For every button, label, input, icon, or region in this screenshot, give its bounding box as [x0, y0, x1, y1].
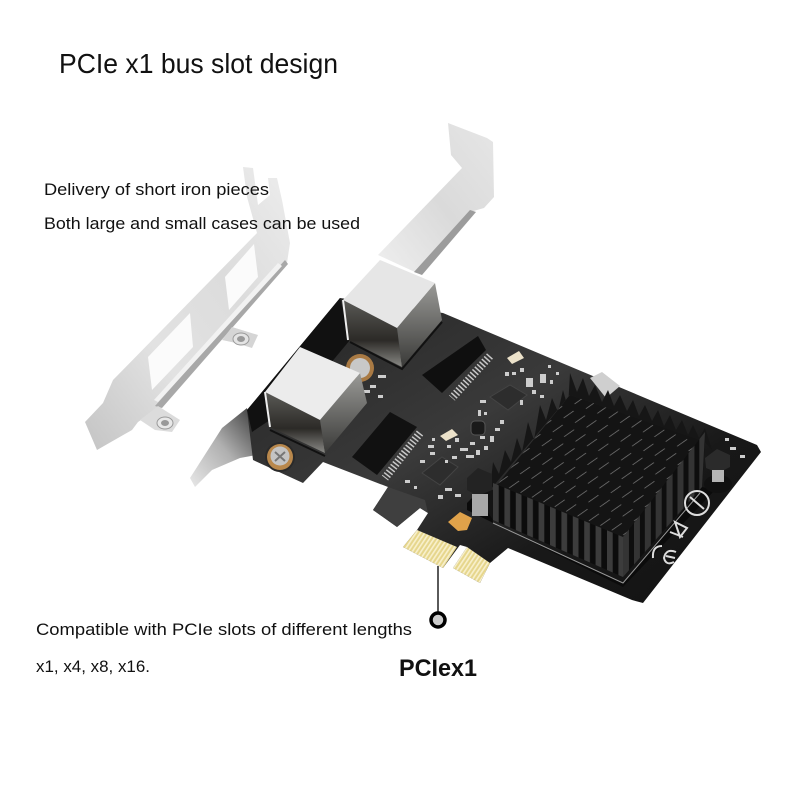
compatibility note: x1, x4, x8, x16. [36, 657, 150, 676]
heatsink [467, 373, 732, 587]
compatibility note [36, 620, 412, 676]
heatsink screws [467, 449, 732, 516]
title: PCIe x1 bus slot design [59, 48, 338, 79]
circuit board [247, 298, 761, 603]
SMD components [358, 351, 745, 499]
board outline trace [493, 493, 700, 583]
inductor [471, 421, 485, 435]
ethernet port front [265, 347, 367, 456]
heatsink top pins [493, 395, 705, 537]
PCIex1 label: PCIex1 [399, 655, 477, 682]
rear screw [346, 354, 374, 382]
heatsink sawtooth back edge [490, 373, 712, 490]
network chip 1 [422, 336, 490, 398]
regulatory marks [653, 491, 709, 563]
screw [265, 442, 295, 472]
bracket window openings [148, 244, 258, 390]
PCIe tab [373, 487, 428, 527]
bracket note: Delivery of short iron pieces [44, 180, 269, 199]
compatibility note: Compatible with PCIe slots of different lengths [36, 620, 412, 639]
bracket note: Both large and small cases can be used [44, 214, 360, 233]
capacitor [448, 512, 472, 531]
network chip 2 [352, 412, 420, 478]
ethernet port rear [343, 260, 442, 369]
PCIe gold fingers [403, 530, 490, 583]
heatsink base [470, 395, 705, 577]
short iron bracket [85, 167, 290, 450]
bracket note [44, 180, 360, 233]
full-height bracket [190, 123, 494, 487]
heatsink front fins [493, 483, 623, 577]
callout marker [431, 566, 445, 627]
rear connector behind heatsink [590, 372, 620, 398]
heatsink side fins [623, 432, 705, 577]
bracket tab holes [140, 327, 258, 432]
small dark ICs [422, 385, 527, 485]
